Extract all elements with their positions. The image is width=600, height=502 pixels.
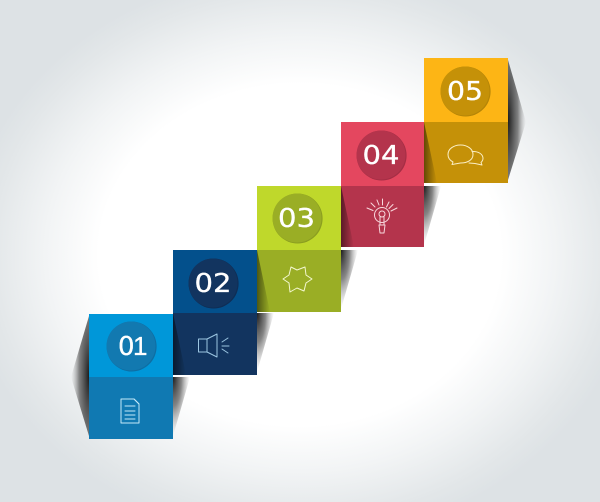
shadow: right arrow behind step 5 <box>508 60 526 180</box>
step 5 lower panel <box>424 122 508 183</box>
shadow: under step 2 <box>257 313 274 372</box>
step 1 number badge: 0 <box>118 332 135 362</box>
step 4 shade wedge <box>341 186 354 247</box>
icon: megaphone <box>198 334 229 357</box>
step 2 <box>173 250 257 375</box>
step 1 <box>89 314 173 439</box>
step 3 <box>257 186 341 312</box>
step 4 lower panel <box>341 186 424 247</box>
step 3 upper panel <box>257 186 341 250</box>
icon: star <box>283 267 312 292</box>
step 4 <box>341 122 424 247</box>
icon: document <box>121 399 139 423</box>
step 1 upper panel <box>89 314 173 377</box>
step 5 shade wedge <box>424 122 437 183</box>
step 2 lower panel <box>173 313 257 375</box>
step 3 lower panel <box>257 250 341 312</box>
icon: light bulb <box>367 199 397 233</box>
shadow: under step 1 <box>173 377 190 436</box>
step 5 number badge: 05 <box>447 77 483 107</box>
shadow: under step 3 <box>341 250 358 309</box>
icon: speech bubbles <box>448 145 483 165</box>
step 4 number badge: 04 <box>362 141 400 171</box>
step 1 number badge: 1 <box>133 331 147 361</box>
step 2 shade wedge <box>173 313 186 375</box>
step 4 upper panel <box>341 122 424 186</box>
step 3 number badge: 03 <box>278 204 315 234</box>
step 1 lower panel <box>89 377 173 439</box>
step 2 number badge: 02 <box>194 269 232 299</box>
step 2 upper panel <box>173 250 257 313</box>
step 3 shade wedge <box>257 250 270 312</box>
shadow: under step 4 <box>424 186 441 245</box>
shadow: left arrow behind step 1 <box>71 316 89 436</box>
step 5 upper panel <box>424 58 508 122</box>
step 5 <box>424 58 508 183</box>
step 1 number badge <box>106 322 157 372</box>
